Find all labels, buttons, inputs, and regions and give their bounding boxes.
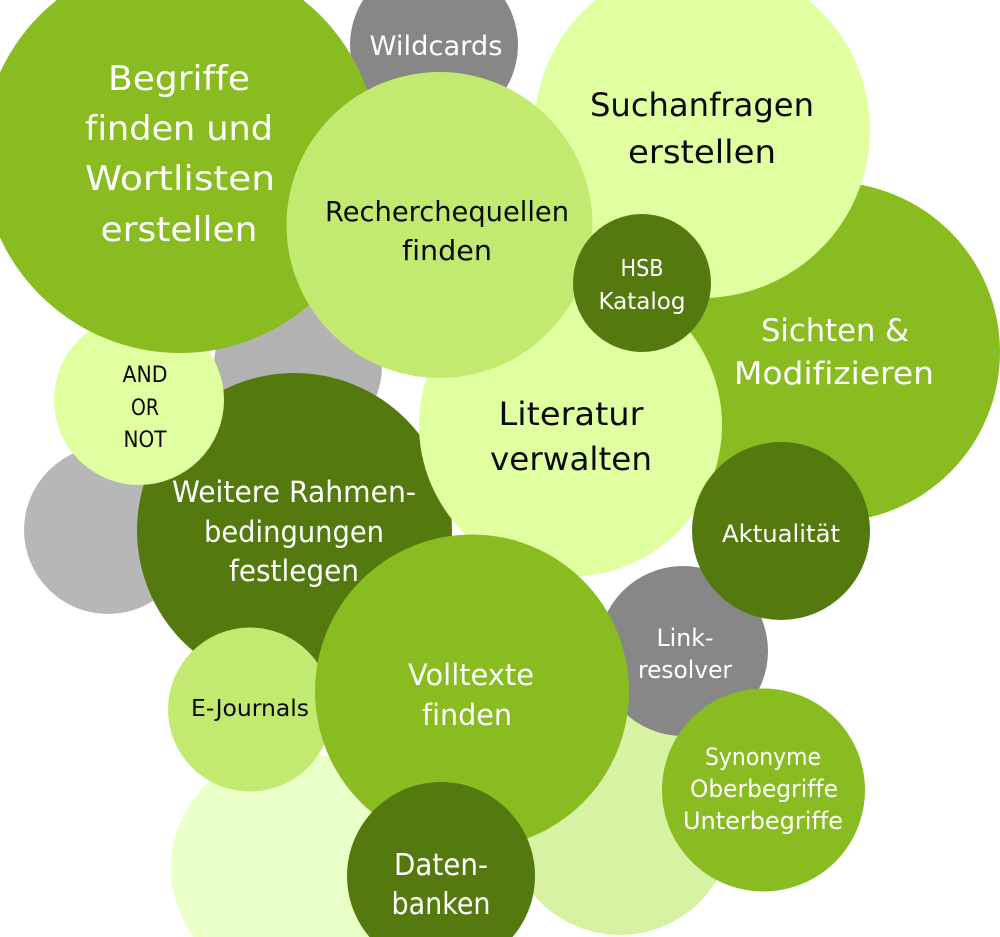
bubble: Volltexte finden: Volltexte (408, 658, 534, 692)
bubble: empty pale green bottom right (507, 709, 733, 935)
bubble: Datenbanken (347, 782, 535, 937)
bubble: Datenbanken: Daten- (394, 848, 488, 883)
bubble: Weitere Rahmenbedingungen festlegen: bedingungen (204, 515, 384, 549)
bubble: Sichten und Modifizieren: Modifizieren (734, 356, 934, 392)
bubble: Datenbanken: banken (392, 887, 490, 922)
bubble: Begriffe finden und Wortlisten erstellen: finden und (85, 109, 273, 149)
bubble: Recherchequellen finden: finden (402, 234, 492, 267)
bubble: Recherchequellen finden: Recherchequellen (325, 195, 569, 228)
bubble: HSB Katalog (573, 214, 711, 352)
bubble: Volltexte finden: finden (422, 698, 512, 732)
bubble: Synonyme Oberbegriffe Unterbegriffe (662, 688, 865, 892)
bubble: Aktualität (692, 442, 870, 620)
bubble: Recherchequellen finden (286, 72, 592, 378)
bubble: Suchanfragen erstellen: erstellen (628, 133, 776, 171)
bubble: Sichten und Modifizieren (660, 182, 1000, 522)
bubble: Link-resolver: Link- (656, 624, 714, 652)
bubble: Wildcards: Wildcards (370, 31, 502, 62)
bubble: HSB Katalog: HSB (620, 256, 664, 282)
bubble: Sichten und Modifizieren: Sichten & (761, 313, 909, 349)
bubble: Link-resolver: resolver (638, 656, 732, 684)
bubble: Synonyme Oberbegriffe Unterbegriffe: Synonyme (705, 743, 821, 771)
bubble: AND OR NOT: OR (131, 396, 159, 421)
bubble: AND OR NOT: NOT (124, 428, 167, 453)
bubble: Weitere Rahmenbedingungen festlegen (137, 373, 452, 688)
bubble: Suchanfragen erstellen (534, 0, 870, 298)
bubble: empty light gray left (24, 446, 192, 614)
bubble: Weitere Rahmenbedingungen festlegen: Weitere Rahmen- (172, 475, 416, 509)
bubble: empty light gray centre (214, 282, 382, 450)
bubble: Synonyme Oberbegriffe Unterbegriffe: Unterbegriffe (683, 807, 843, 835)
bubble: Aktualität: Aktualität (722, 520, 840, 548)
bubble: Link-resolver (598, 566, 768, 736)
bubble: Begriffe finden und Wortlisten erstellen: Wortlisten (85, 159, 275, 199)
bubble: Synonyme Oberbegriffe Unterbegriffe: Oberbegriffe (690, 775, 838, 803)
bubble: Literatur verwalten (419, 274, 722, 576)
bubble: E-Journals (168, 628, 332, 792)
bubble: HSB Katalog: Katalog (598, 289, 686, 315)
bubble: Literatur verwalten: verwalten (490, 440, 652, 478)
bubble: Volltexte finden (315, 534, 629, 848)
bubble: Literatur verwalten: Literatur (498, 395, 644, 433)
bubble: Suchanfragen erstellen: Suchanfragen (590, 86, 814, 124)
bubble: E-Journals: E-Journals (191, 696, 309, 722)
bubble: Begriffe finden und Wortlisten erstellen (0, 0, 378, 353)
bubble: Begriffe finden und Wortlisten erstellen: Begriffe (108, 59, 250, 99)
bubble: empty very light green bottom left (171, 750, 407, 937)
bubble: Weitere Rahmenbedingungen festlegen: festlegen (229, 554, 359, 588)
bubble: AND OR NOT (54, 315, 224, 485)
bubble: Wildcards (350, 0, 518, 129)
bubble: AND OR NOT: AND (122, 363, 168, 388)
bubble: Begriffe finden und Wortlisten erstellen: erstellen (100, 210, 258, 250)
